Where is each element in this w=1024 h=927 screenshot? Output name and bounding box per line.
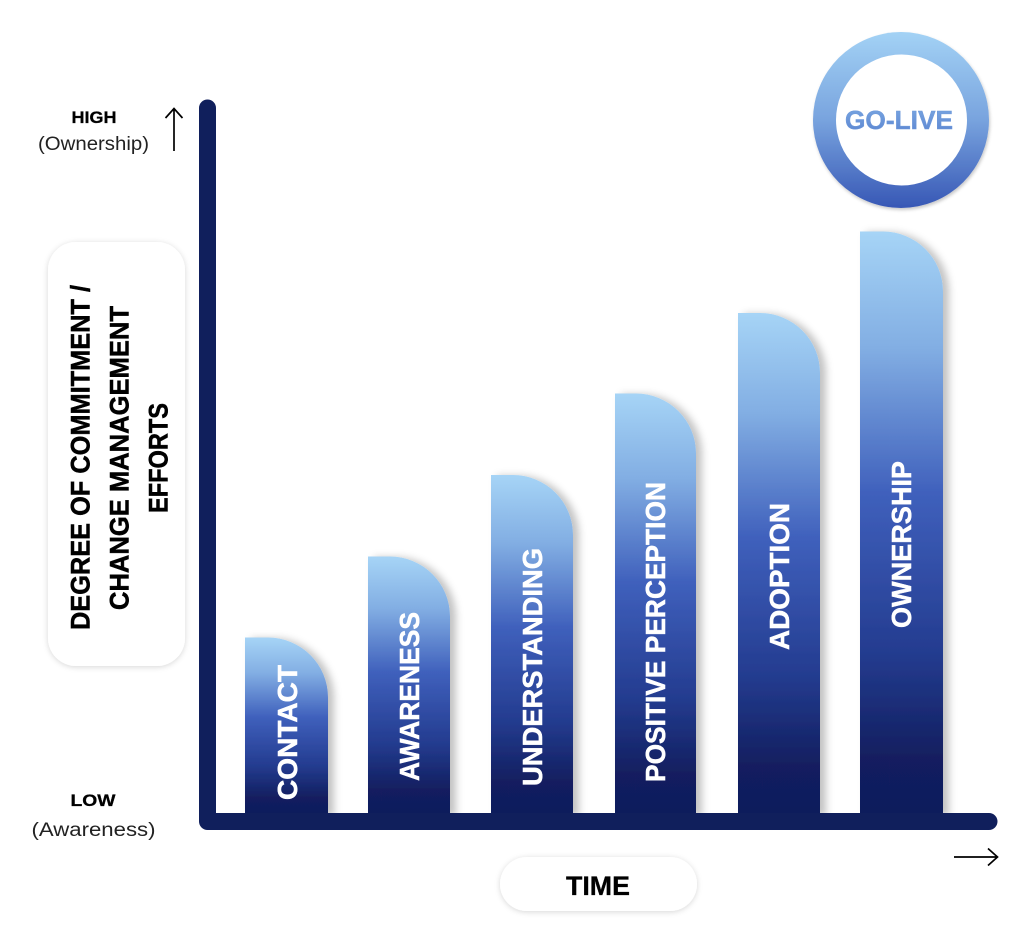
label: low [32, 791, 156, 841]
badge: go-live: GO-LIVE [845, 105, 953, 135]
axes [208, 108, 989, 822]
arrow: right [954, 848, 998, 866]
label: low: LOW [70, 791, 117, 810]
arrow: up [166, 108, 182, 151]
y-axis title line 2: CHANGE MANAGEMENT [104, 306, 134, 610]
bar: adoption: ADOPTION [764, 503, 795, 650]
bar: positive perception: POSITIVE PERCEPTION [640, 482, 671, 782]
bar: positive perception [615, 394, 696, 815]
label: high: HIGH [72, 108, 116, 127]
bar: understanding: UNDERSTANDING [517, 548, 548, 786]
bar: awareness: AWARENESS [394, 612, 425, 781]
bar: contact [245, 638, 328, 815]
label: high [38, 108, 149, 155]
bar: ownership [860, 232, 943, 815]
bar: contact: CONTACT [272, 665, 303, 800]
panel: y-axis title [48, 242, 185, 666]
label: low: (Awareness) [32, 820, 156, 841]
y-axis title line 1: DEGREE OF COMMITMENT / [66, 284, 96, 630]
y-axis title line 3: EFFORTS [144, 403, 174, 513]
bar: adoption [738, 313, 820, 815]
pill: time [500, 857, 697, 911]
pill: time: TIME [566, 871, 630, 901]
bar: ownership: OWNERSHIP [886, 461, 917, 628]
label: high: (Ownership) [38, 134, 149, 155]
bar: awareness [368, 556, 450, 815]
bar: understanding [491, 475, 573, 815]
badge: go-live [813, 32, 989, 208]
